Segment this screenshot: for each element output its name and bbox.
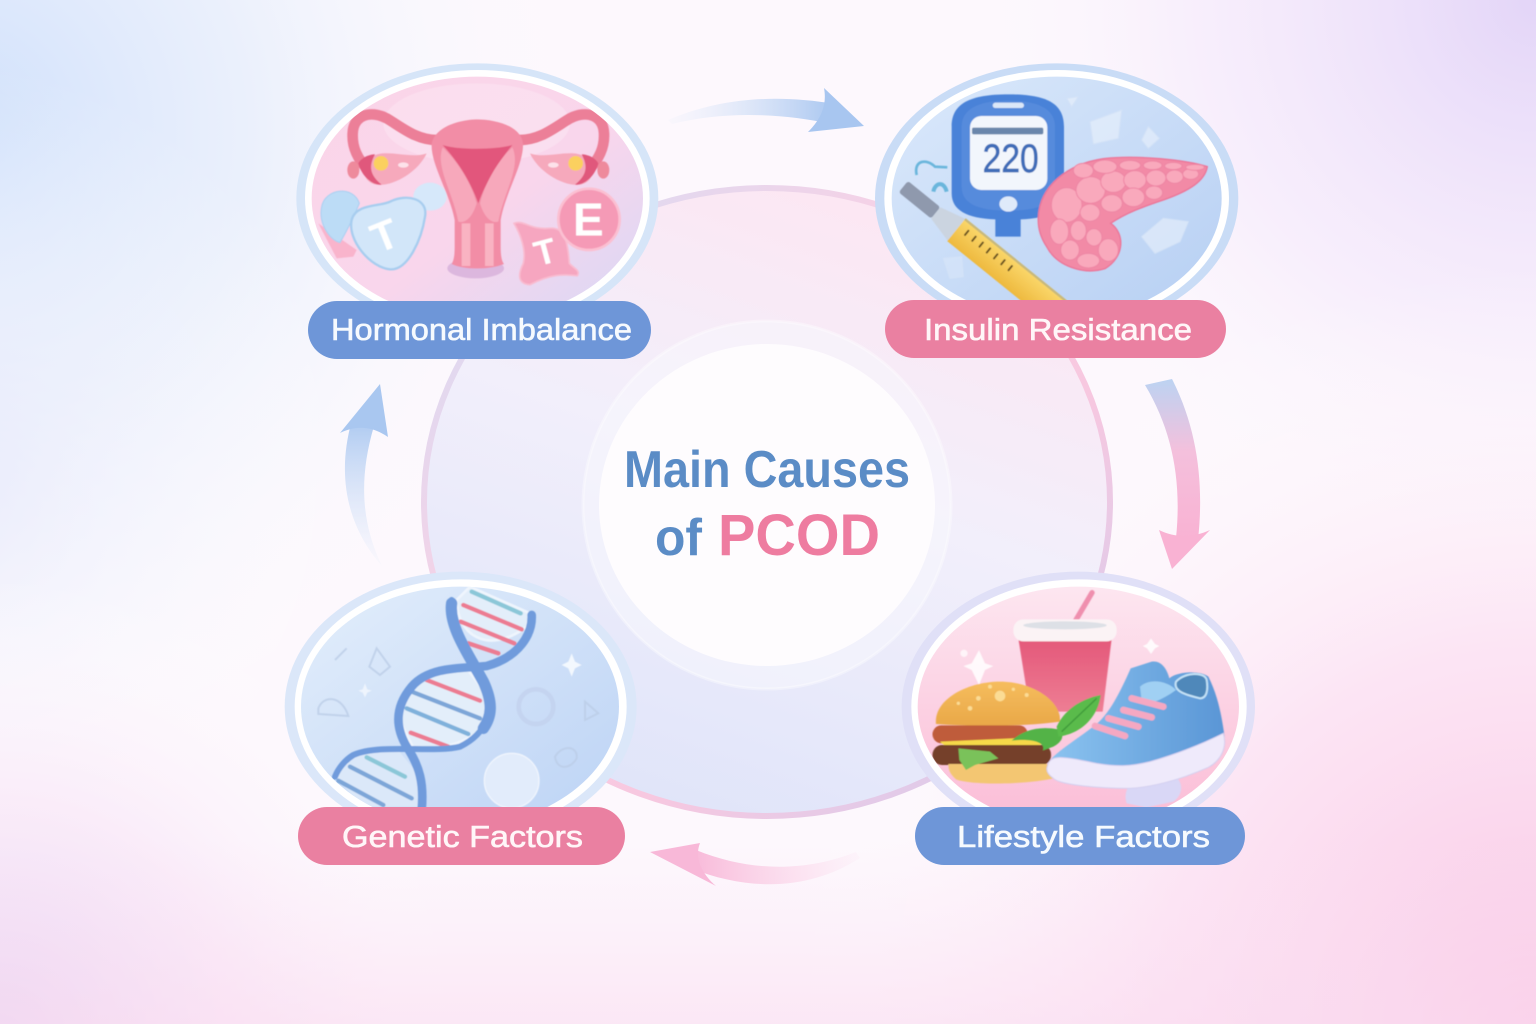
central title circle — [583, 321, 951, 689]
icon: burger, drink and sneaker — [933, 593, 1225, 807]
label pill: Insulin Resistance — [924, 312, 1192, 347]
panel: insulin resistance — [875, 63, 1238, 358]
arrow: bottom — [650, 843, 860, 886]
panel: lifestyle factors — [902, 572, 1255, 865]
icon: dna helix — [318, 587, 598, 810]
label pill — [308, 301, 651, 359]
title: Main Causes — [624, 441, 910, 499]
label pill: Lifestyle Factors — [957, 819, 1210, 854]
icon: glucose meter, insulin pen and pancreas: 220 — [983, 137, 1039, 181]
title: of — [655, 509, 703, 567]
icon: uterus and hormones: T — [364, 209, 405, 262]
icon: uterus and hormones: T — [530, 231, 561, 274]
title — [624, 441, 910, 568]
label pill — [915, 807, 1245, 865]
title: PCOD — [718, 503, 880, 568]
label pill — [298, 807, 625, 865]
arrow: top — [668, 88, 864, 132]
central ring disc — [424, 188, 1110, 816]
label pill — [885, 300, 1226, 358]
panel: genetic factors — [285, 572, 637, 865]
arrow: right — [1145, 379, 1210, 569]
icon: uterus and hormones — [318, 83, 620, 285]
panel: hormonal imbalance — [296, 63, 658, 359]
icon: glucose meter, insulin pen and pancreas — [899, 94, 1208, 300]
arrow: left — [340, 384, 388, 566]
label pill: Genetic Factors — [342, 819, 583, 854]
icon: uterus and hormones: E — [573, 194, 604, 246]
label pill: Hormonal Imbalance — [331, 312, 632, 347]
